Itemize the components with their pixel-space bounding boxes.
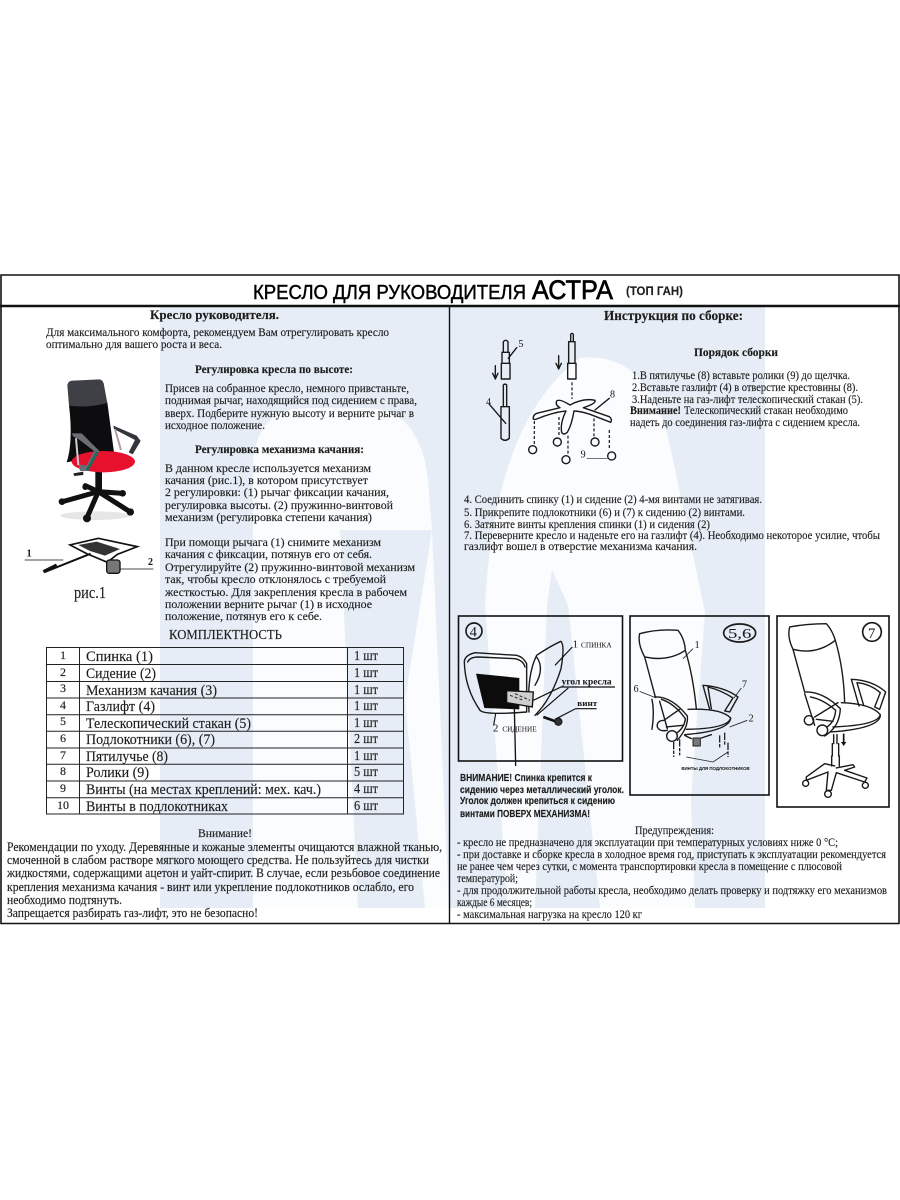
table: contents: 1 [60, 648, 66, 662]
text: assembly steps 1-3: 2.Вставьте газлифт (4) в отверстие крестовины (8). [632, 380, 858, 394]
callout: back attachment warning: Уголок должен крепиться к сидению [460, 795, 615, 807]
illustration: tilt mechanism (fig. 1): 2 [148, 557, 153, 568]
panel: steps 5,6 diagram [630, 616, 769, 795]
text: tilt mechanism description: В данном кресле используется механизм [165, 461, 371, 475]
text: tilt mechanism usage: Отрегулируйте (2) пружинно-винтовой механизм [165, 560, 415, 574]
text: assembly steps 1-3: надеть до соединения газ-лифта с сидением кресла. [630, 415, 860, 429]
text: care recommendations: смоченной в слабом растворе мягкого моющего средства. Не пользуйтесь для чистки [7, 853, 429, 867]
panel: steps 5,6 diagram: 2 [749, 713, 754, 724]
heading: warnings: Предупреждения: [635, 823, 714, 837]
title: (ТОП ГАН) [626, 284, 683, 298]
text: assembly steps 1-3 [630, 368, 863, 429]
illustration: office chair photo [59, 379, 141, 522]
heading: attention: Внимание! [198, 826, 252, 840]
heading: chair: Кресло руководителя. [150, 307, 279, 322]
table: contents: 4 [60, 698, 66, 712]
table: contents: 6 [60, 731, 66, 745]
callout: back attachment warning [460, 772, 624, 820]
intro text [46, 325, 389, 351]
panel: step 4 diagram: СИДЕНИЕ [502, 724, 537, 733]
table: contents: Сидение (2) [86, 666, 156, 682]
panel: steps 5,6 diagram: ВИНТЫ ДЛЯ ПОДЛОКОТНИКОВ [681, 766, 750, 772]
panel: step 4 diagram: 2 [493, 723, 498, 734]
table: contents: Винты в подлокотниках [86, 799, 228, 815]
text: tilt mechanism description: механизм (регулировка степени качания) [165, 510, 372, 524]
text: tilt mechanism usage: так, чтобы кресло отклонялось с требуемой [165, 572, 387, 586]
text: care recommendations [6, 840, 442, 920]
illustration: assembly parts: 5 [518, 339, 523, 350]
heading: height adjustment: Регулировка кресла по высоте: [195, 362, 353, 376]
panel: step 4 diagram [458, 616, 622, 766]
table: contents: 1 шт [354, 666, 378, 681]
text: height adjustment: поднимая рычаг, находящийся под сидением с права, [165, 393, 417, 407]
text: warnings list: каждые 6 месяцев; [457, 895, 532, 909]
panel: step 7 diagram: 7 [868, 626, 875, 642]
text: tilt mechanism description: регулировка высоты. (2) пружинно-винтовой [165, 498, 394, 512]
text: height adjustment: вверх. Подберите нужную высоту и верните рычаг в [165, 406, 414, 420]
table: contents [46, 647, 404, 815]
heading: assembly order: Порядок сборки [694, 345, 778, 359]
table: contents: 10 [57, 798, 69, 812]
callout: back attachment warning: сидению через металлический уголок. [460, 784, 624, 796]
heading: assembly instructions: Инструкция по сборке: [604, 309, 743, 324]
panel: step 4 diagram: винт [577, 699, 597, 708]
table: contents: 1 шт [354, 649, 378, 664]
panel: steps 5,6 diagram: 5,6 [728, 626, 752, 641]
text: care recommendations: Запрещается разбирать газ-лифт, это не безопасно! [7, 906, 258, 920]
text: warnings list [457, 835, 887, 921]
text: assembly steps 1-3: Внимание! [630, 403, 681, 417]
panel: step 7 diagram [777, 616, 889, 807]
panel: steps 5,6 diagram: 6 [634, 684, 639, 695]
table: contents: Подлокотники (6), (7) [86, 732, 215, 748]
table: contents: 6 шт [354, 799, 378, 814]
panel: step 4 diagram: 1 [573, 640, 578, 651]
text: care recommendations: жидкостями, содержащими ацетон и уайт-спирит. В случае, если резьбовое соединение [6, 866, 440, 880]
text: tilt mechanism usage: При помощи рычага (1) снимите механизм [165, 535, 381, 549]
callout: back attachment warning: ВНИМАНИЕ! Спинка крепится к [460, 772, 593, 784]
table: contents: 7 [60, 748, 66, 762]
illustration: assembly parts: 4 [486, 397, 491, 408]
panel: steps 5,6 diagram: 1 [695, 640, 700, 651]
text: warnings list: - кресло не предназначено для эксплуатации при температурных условиях ниже 0 °C; [457, 835, 838, 849]
text: height adjustment: Присев на собранное кресло, немного привстаньте, [165, 381, 409, 395]
table: contents: 1 шт [354, 749, 378, 764]
text: care recommendations: необходимо подтянуть. [7, 893, 122, 907]
table: contents: Ролики (9) [86, 765, 149, 781]
text: assembly steps 4-7: 6. Затяните винты крепления спинки (1) и сидения (2) [464, 517, 710, 531]
text: care recommendations: крепления механизма качания - винт или укрепление подлокотников ослабло, его [7, 880, 414, 894]
text: tilt mechanism description [165, 461, 394, 524]
panel: step 4 diagram: СПИНКА [581, 641, 612, 650]
caption: fig. 1: рис.1 [74, 583, 106, 602]
panel: step 4 diagram: угол кресла [562, 676, 612, 686]
table: contents: Механизм качания (3) [86, 683, 217, 699]
table: contents: 5 шт [354, 765, 378, 780]
table: contents: 5 [60, 714, 66, 728]
table: contents: 1 шт [354, 699, 378, 714]
text: assembly steps 1-3: 1.В пятилучье (8) вставьте ролики (9) до щелчка. [632, 368, 850, 382]
illustration: assembly parts [486, 333, 616, 464]
text: assembly steps 1-3: 3.Наденьте на газ-лифт телескопический стакан (5). [632, 392, 863, 406]
table: contents: Пятилучье (8) [86, 749, 168, 765]
illustration: assembly parts: 8 [610, 390, 615, 401]
panel: steps 5,6 diagram: 7 [742, 679, 747, 690]
panel: left column text on chair adjustment [46, 307, 417, 623]
heading: tilt mechanism: Регулировка механизма качания: [195, 442, 364, 456]
illustration: tilt mechanism (fig. 1): 1 [27, 549, 32, 560]
text: assembly steps 4-7: 5. Прикрепите подлокотники (6) и (7) к сидению (2) винтами. [464, 505, 745, 519]
watermark background [160, 306, 765, 908]
table: contents: Винты (на местах креплений: мех. кач.) [86, 782, 321, 798]
text: height adjustment [165, 381, 417, 432]
table: contents: Телескопический стакан (5) [86, 716, 251, 732]
text: tilt mechanism usage: положении верните рычаг (1) в исходное [165, 597, 372, 611]
text: tilt mechanism usage: качания с фиксации, потянув его от себя. [165, 547, 372, 561]
table: contents: 2 шт [354, 732, 378, 747]
text: warnings list: - максимальная нагрузка на кресло 120 кг [457, 907, 642, 921]
panel: step 4 diagram: 4 [470, 624, 478, 640]
text: assembly steps 4-7: 4. Соединить спинку (1) и сидение (2) 4-мя винтами не затягивая. [464, 492, 762, 506]
text: assembly steps 4-7 [464, 492, 880, 553]
text: assembly steps 4-7: газлифт вошел в отверстие механизма качания. [464, 539, 697, 553]
illustration: tilt mechanism (fig. 1) [25, 538, 153, 573]
table: contents: 3 [60, 681, 66, 695]
text: tilt mechanism usage: положение, потянув его к себе. [165, 609, 322, 623]
text: height adjustment: исходное положение. [165, 418, 265, 432]
text: care recommendations: Рекомендации по уходу. Деревянные и кожаные элементы очищаются влажной тканью, [7, 840, 442, 854]
table: contents: Газлифт (4) [86, 699, 155, 715]
intro text: Для максимального комфорта, рекомендуем Вам отрегулировать кресло [46, 325, 389, 339]
table: contents: 8 [60, 764, 66, 778]
heading: contents: КОМПЛЕКТНОСТЬ [169, 628, 282, 643]
table: contents: 2 [60, 665, 66, 679]
table: contents: Спинка (1) [86, 649, 153, 665]
table: contents: 1 шт [354, 683, 378, 698]
text: tilt mechanism usage [164, 535, 415, 623]
table: contents: 4 шт [354, 782, 378, 797]
intro text: оптимально для вашего роста и веса. [46, 337, 222, 351]
title: КРЕСЛО ДЛЯ РУКОВОДИТЕЛЯ [253, 282, 526, 304]
text: tilt mechanism description: качания (рис.1), в котором присутствует [165, 473, 369, 487]
text: tilt mechanism usage: жесткостью. Для закрепления кресла в рабочем [164, 585, 407, 599]
callout: back attachment warning: винтами ПОВЕРХ МЕХАНИЗМА! [460, 808, 590, 820]
illustration: assembly parts: 9 [581, 450, 586, 461]
text: assembly steps 1-3: Телескопический стакан необходимо [684, 403, 848, 417]
table: contents: 1 шт [354, 716, 378, 731]
title: АСТРА [532, 275, 613, 305]
table: contents: 9 [60, 781, 66, 795]
text: warnings list: не ранее чем через сутки, с момента транспортировки кресла в помещение с плюсовой [457, 859, 842, 873]
text: warnings list: температурой; [457, 871, 518, 885]
text: tilt mechanism description: 2 регулировки: (1) рычаг фиксации качания, [165, 485, 389, 499]
title [253, 275, 683, 305]
